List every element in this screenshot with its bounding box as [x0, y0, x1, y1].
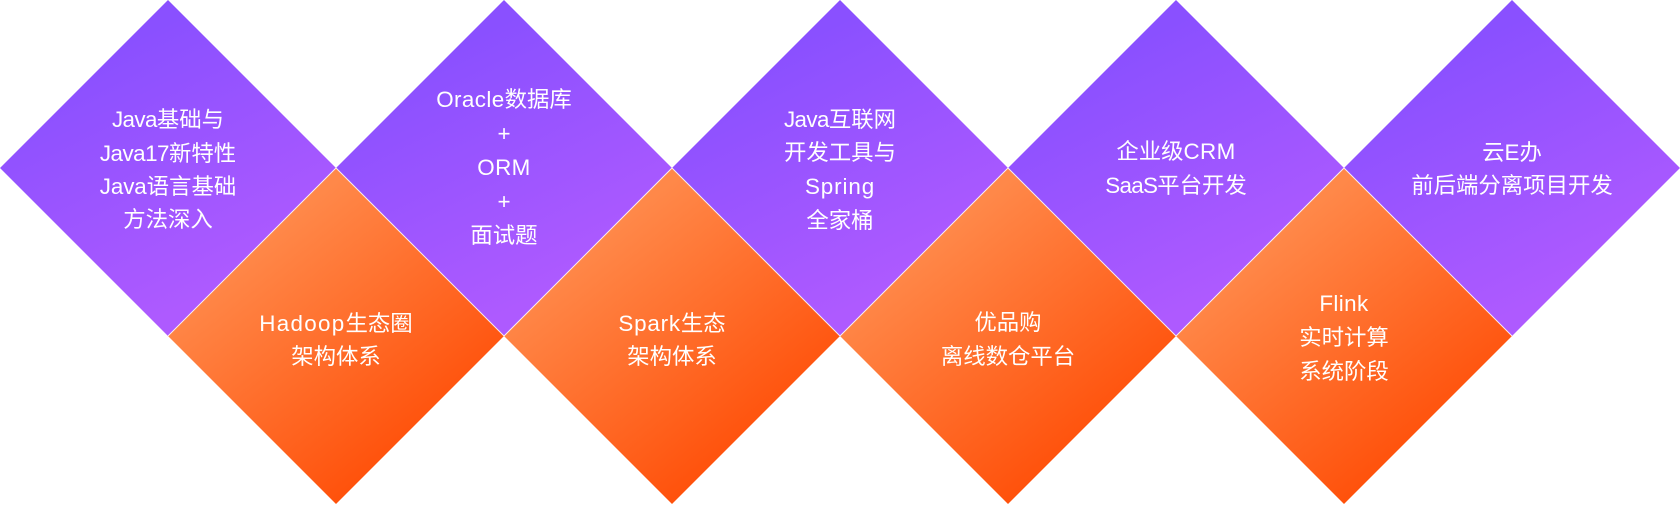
panel: Flink: 系统阶段	[1299, 359, 1389, 384]
panel: Hadoop: Hadoop生态圈	[259, 311, 413, 336]
panel: Java internet tools: Spring	[805, 174, 875, 199]
panel: CRM SaaS	[1008, 0, 1344, 336]
panel: Java basics: Java17新特性	[100, 141, 236, 166]
panel: Cloud E office: 云E办	[1482, 140, 1542, 165]
panel: Java basics: 方法深入	[123, 207, 213, 232]
panel: CRM SaaS: SaaS平台开发	[1105, 173, 1247, 198]
panel: Java basics	[0, 0, 336, 336]
panel: Oracle and ORM: +	[497, 121, 511, 146]
panel: Java internet tools	[672, 0, 1008, 336]
panel: Spark: 架构体系	[627, 344, 717, 369]
panel: Oracle and ORM: +	[497, 189, 511, 214]
panel: Flink: 实时计算	[1299, 325, 1389, 350]
panel: Java internet tools: 全家桶	[806, 208, 874, 233]
panel: Youpingou: 离线数仓平台	[941, 344, 1075, 369]
panel: Cloud E office	[1344, 0, 1680, 336]
panel: Oracle and ORM: Oracle数据库	[436, 87, 572, 112]
panel: Java internet tools: 开发工具与	[784, 140, 896, 165]
panel: Java basics: Java语言基础	[100, 174, 236, 199]
panel: Java internet tools: Java互联网	[784, 107, 896, 132]
panel: Oracle and ORM: ORM	[477, 155, 531, 180]
panel: CRM SaaS: 企业级CRM	[1116, 139, 1236, 164]
panel: Spark: Spark生态	[618, 311, 726, 336]
panel: Oracle and ORM	[336, 0, 672, 336]
panel: Hadoop: 架构体系	[291, 344, 381, 369]
panel: Spark	[504, 168, 840, 504]
panel: Flink: Flink	[1319, 291, 1369, 316]
panel: Youpingou: 优品购	[974, 310, 1042, 335]
panel: Cloud E office: 前后端分离项目开发	[1411, 173, 1613, 198]
panel: Java basics: Java基础与	[112, 107, 224, 132]
panel: Youpingou	[840, 168, 1176, 504]
panel: Flink	[1176, 168, 1512, 504]
panel: Hadoop	[168, 168, 504, 504]
panel: Oracle and ORM: 面试题	[470, 223, 538, 248]
